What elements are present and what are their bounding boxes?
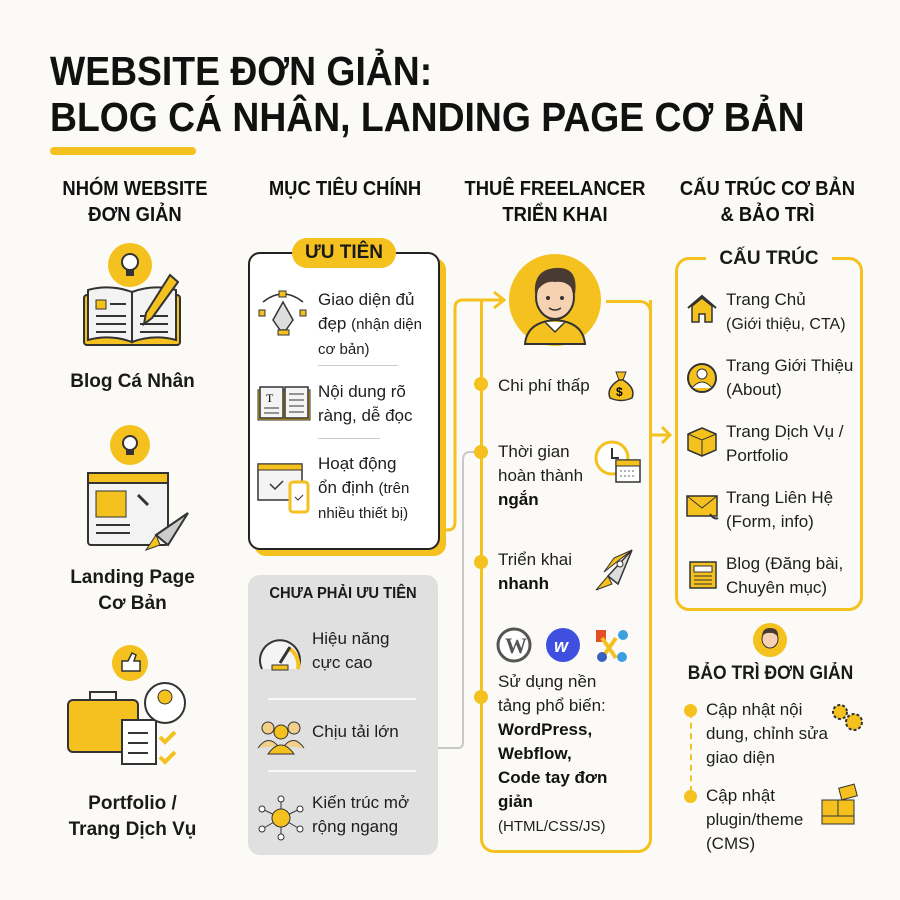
title: WEBSITE ĐƠN GIẢN: bbox=[50, 48, 432, 94]
item: chi phí: Chi phí thấp bbox=[498, 376, 590, 395]
column header: mục tiêu: MỤC TIÊU CHÍNH bbox=[269, 178, 421, 200]
item: nền tảng: WordPress, bbox=[498, 720, 592, 739]
item: cập nhật plugin: (CMS) bbox=[706, 834, 755, 853]
item: blog: Blog (Đăng bài, bbox=[726, 554, 843, 573]
heading: bảo trì: BẢO TRÌ ĐƠN GIẢN bbox=[688, 663, 853, 684]
item: trang chủ: (Giới thiệu, CTA) bbox=[726, 316, 846, 333]
label: Trang Dịch Vụ bbox=[69, 819, 196, 840]
label: Portfolio / bbox=[88, 793, 177, 814]
item: dịch vụ: Portfolio bbox=[726, 446, 788, 465]
item: nền tảng: tảng phổ biến: bbox=[498, 696, 606, 715]
item: triển khai: nhanh bbox=[498, 574, 549, 593]
column header: freelancer bbox=[464, 176, 645, 226]
item: giới thiệu: (About) bbox=[726, 380, 782, 399]
item: kiến trúc: rộng ngang bbox=[312, 817, 398, 836]
column header: cấu trúc: CẤU TRÚC CƠ BẢN bbox=[680, 178, 855, 200]
item: chi phí: $ bbox=[616, 385, 623, 399]
icon: book with bulb bbox=[83, 243, 181, 346]
icon: briefcase bbox=[67, 645, 186, 765]
item: giao diện: Giao diện đủ bbox=[318, 290, 414, 309]
column header: cấu trúc bbox=[680, 176, 855, 226]
item: giới thiệu: Trang Giới Thiệu bbox=[726, 356, 853, 375]
item: nội dung: T bbox=[266, 391, 274, 405]
item: liên hệ: Trang Liên Hệ bbox=[726, 488, 833, 507]
badge: ưu tiên bbox=[292, 238, 396, 268]
heading bbox=[706, 245, 832, 273]
item: triển khai bbox=[498, 550, 633, 593]
badge: ưu tiên: ƯU TIÊN bbox=[305, 242, 383, 263]
logos: wordpress, webflow, html bbox=[496, 628, 628, 662]
group: portfolio bbox=[67, 645, 196, 840]
item: cập nhật nội dung: Cập nhật nội bbox=[706, 700, 802, 719]
item: trang chủ: Trang Chủ bbox=[726, 290, 806, 309]
label: Landing Page bbox=[70, 567, 195, 588]
item: cập nhật nội dung: dung, chỉnh sửa bbox=[706, 724, 828, 743]
item: hoạt động: ổn định (trên bbox=[318, 478, 409, 497]
panel: ưu tiên bbox=[248, 252, 440, 550]
label bbox=[70, 567, 195, 614]
item: cập nhật nội dung: giao diện bbox=[706, 748, 775, 767]
item: kiến trúc bbox=[258, 793, 409, 840]
label: Cơ Bản bbox=[98, 593, 167, 614]
item: nền tảng: (HTML/CSS/JS) bbox=[498, 818, 606, 835]
column header: freelancer: THUÊ FREELANCER bbox=[465, 178, 645, 200]
heading: CẤU TRÚC bbox=[719, 248, 819, 269]
group: blog bbox=[70, 243, 195, 392]
dividers bbox=[318, 365, 398, 366]
item: cập nhật plugin: Cập nhật bbox=[706, 786, 775, 805]
item: giao diện bbox=[258, 290, 422, 358]
item: thời gian: ngắn bbox=[498, 490, 539, 509]
title underline bbox=[50, 147, 196, 155]
label bbox=[68, 793, 196, 840]
item: chi phí bbox=[498, 372, 634, 402]
item: nền tảng: Code tay đơn bbox=[498, 768, 607, 787]
logos: wordpress, webflow, html: W bbox=[505, 633, 527, 658]
item: chịu tải: Chịu tải lớn bbox=[312, 722, 399, 741]
avatar: freelancer bbox=[509, 254, 601, 346]
maintenance timeline bbox=[684, 700, 863, 853]
column header: nhóm website: NHÓM WEBSITE bbox=[62, 178, 208, 200]
item: nội dung: ràng, dễ đọc bbox=[318, 406, 413, 425]
item: nền tảng: Sử dụng nền bbox=[498, 672, 596, 691]
item: nền tảng: giản bbox=[498, 792, 533, 811]
item: nội dung: Nội dung rõ bbox=[318, 382, 406, 401]
item: cập nhật plugin bbox=[706, 786, 803, 853]
item: kiến trúc: Kiến trúc mở bbox=[312, 793, 409, 812]
item: giao diện: đẹp (nhận diện bbox=[318, 314, 422, 333]
item: hoạt động bbox=[257, 454, 409, 522]
item: thời gian: hoàn thành bbox=[498, 466, 583, 485]
timeline dots bbox=[474, 377, 488, 391]
column header: freelancer: TRIỂN KHAI bbox=[502, 204, 608, 226]
avatar: maintenance bbox=[753, 623, 787, 657]
column header: nhóm website bbox=[62, 176, 208, 226]
item: nền tảng: Webflow, bbox=[498, 744, 572, 763]
item: liên hệ: (Form, info) bbox=[726, 512, 814, 531]
item: chịu tải bbox=[258, 722, 399, 754]
column header: nhóm website: ĐƠN GIẢN bbox=[88, 204, 182, 226]
item: hoạt động: Hoạt động bbox=[318, 454, 396, 473]
item: thời gian bbox=[498, 440, 641, 509]
dividers bbox=[268, 698, 416, 700]
item: hoạt động: nhiều thiết bị) bbox=[318, 505, 408, 522]
item: nền tảng bbox=[498, 672, 607, 835]
item: hiệu năng: Hiệu năng bbox=[312, 629, 390, 648]
panel: chưa phải ưu tiên bbox=[248, 575, 438, 855]
icon: browser with rocket bbox=[87, 425, 189, 551]
item: dịch vụ: Trang Dịch Vụ / bbox=[726, 422, 843, 441]
item: blog bbox=[689, 554, 843, 597]
item: cập nhật nội dung bbox=[706, 700, 828, 767]
logos: wordpress, webflow, html: w bbox=[554, 636, 569, 656]
icon: gears bbox=[832, 704, 863, 731]
item: hiệu năng: cực cao bbox=[312, 653, 373, 672]
item: liên hệ bbox=[686, 488, 833, 531]
label: Blog Cá Nhân bbox=[70, 371, 195, 392]
item: giới thiệu bbox=[687, 356, 853, 399]
title bbox=[50, 48, 805, 140]
icon: puzzle bbox=[822, 784, 858, 824]
item: thời gian: Thời gian bbox=[498, 442, 570, 461]
heading: CHƯA PHẢI ƯU TIÊN bbox=[269, 585, 417, 602]
item: triển khai: Triển khai bbox=[498, 550, 572, 569]
item: dịch vụ bbox=[687, 422, 844, 465]
panel: cấu trúc bbox=[675, 257, 863, 611]
item: cập nhật plugin: plugin/theme bbox=[706, 810, 803, 829]
item: trang chủ bbox=[687, 290, 846, 333]
item: hiệu năng bbox=[259, 629, 390, 672]
title: BLOG CÁ NHÂN, LANDING PAGE CƠ BẢN bbox=[50, 94, 805, 140]
column header: cấu trúc: & BẢO TRÌ bbox=[720, 204, 815, 226]
panel: freelancer bbox=[480, 300, 652, 853]
item: giao diện: cơ bản) bbox=[318, 341, 370, 358]
item: nội dung bbox=[258, 382, 413, 425]
group: landing page bbox=[70, 425, 195, 614]
item: blog: Chuyên mục) bbox=[726, 578, 827, 597]
